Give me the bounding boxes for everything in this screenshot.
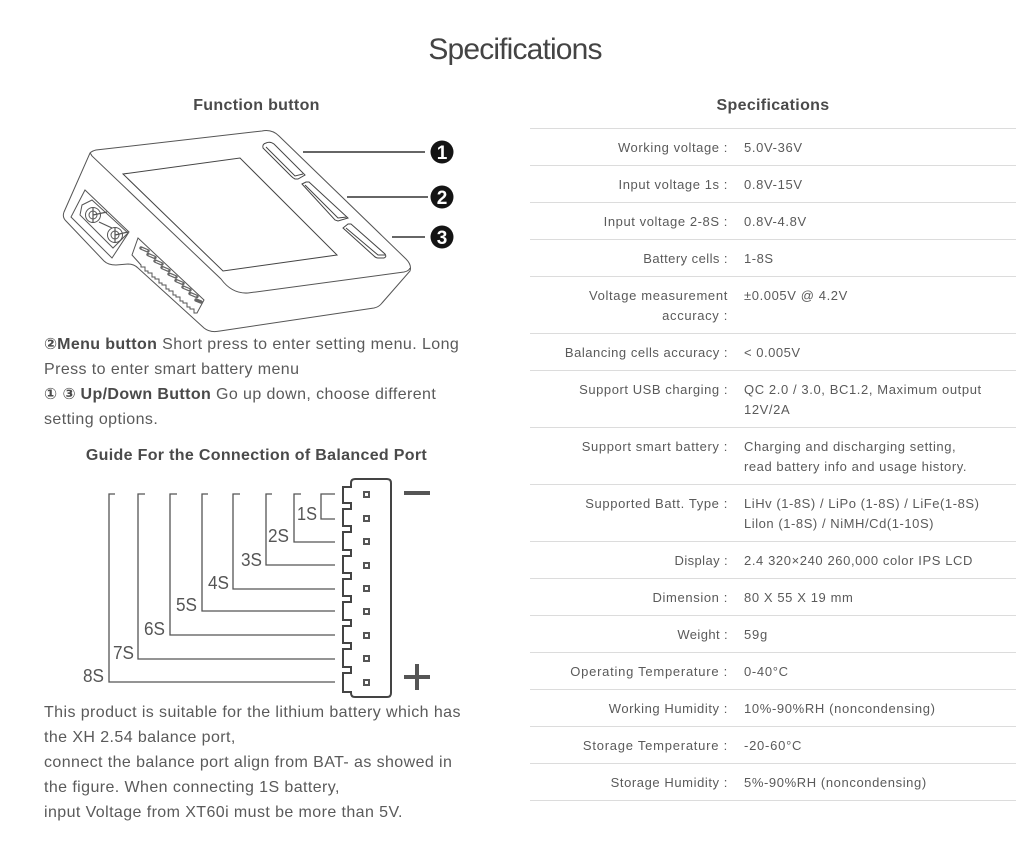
wire labels: 2S [268, 526, 289, 546]
row: USB charging: QC 2.0 / 3.0, BC1.2, Maximum output [744, 382, 982, 397]
row: storage humidity: Storage Humidity : [611, 775, 728, 790]
row: input voltage 1s: 0.8V-15V [744, 177, 803, 192]
row: working voltage: Working voltage : [618, 140, 728, 155]
balance port wiring diagram [83, 478, 430, 698]
row: display: Display : [675, 553, 728, 568]
heading: function button: Function button [193, 97, 320, 114]
callout line 3 [392, 236, 425, 238]
row: input voltage 2-8S: Input voltage 2-8S : [604, 214, 728, 229]
wire labels: 6S [144, 619, 165, 639]
row: battery cells: 1-8S [744, 251, 774, 266]
row: smart battery: Charging and discharging setting, [744, 439, 956, 454]
text: button descriptions: Press to enter smart battery menu [44, 361, 299, 378]
row: weight: 59g [744, 627, 768, 642]
row: battery type: Lilon (1-8S) / NiMH/Cd(1-10S) [744, 516, 934, 531]
connector housing [343, 479, 391, 697]
row: input voltage 1s: Input voltage 1s : [619, 177, 728, 192]
callout marker 2 [430, 186, 454, 209]
wire labels: 7S [113, 643, 134, 663]
text: balance port note: This product is suitable for the lithium battery which has [44, 704, 461, 721]
row: smart battery: Support smart battery : [582, 439, 728, 454]
callout line 1 [303, 151, 425, 153]
connector pins [364, 492, 369, 685]
wire labels: 5S [176, 595, 197, 615]
row: USB charging: Support USB charging : [579, 382, 728, 397]
icon: button 3 [343, 224, 386, 258]
text: balance port note [44, 704, 461, 821]
wire labels [83, 504, 317, 686]
wire labels: 8S [83, 666, 104, 686]
text: button descriptions: setting options. [44, 411, 158, 428]
icon: power port [71, 190, 129, 258]
row: working humidity: 10%-90%RH (noncondensing) [744, 701, 936, 716]
row: balancing cells accuracy: < 0.005V [744, 345, 801, 360]
text: balance port note: the figure. When connecting 1S battery, [44, 779, 340, 796]
icon: screen [123, 158, 337, 271]
row: dimension: 80 X 55 X 19 mm [744, 590, 853, 605]
callout marker 1 [430, 140, 454, 164]
row: operating temperature: 0-40°C [744, 664, 789, 679]
wire labels: 4S [208, 573, 229, 593]
row: USB charging: 12V/2A [744, 402, 790, 417]
callout marker 3: 3 [437, 228, 447, 249]
icon: device body [63, 131, 410, 332]
minus sign [404, 491, 430, 495]
plus sign [404, 664, 430, 690]
device illustration with button callouts [62, 130, 454, 332]
row: battery type: Supported Batt. Type : [585, 496, 728, 511]
row: working voltage: 5.0V-36V [744, 140, 803, 155]
callout line 2 [347, 196, 428, 198]
heading: balanced port guide: Guide For the Connection of Balanced Port [86, 447, 427, 464]
row: weight: Weight : [677, 627, 728, 642]
heading: specifications table: Specifications [717, 97, 829, 114]
row: input voltage 2-8S: 0.8V-4.8V [744, 214, 807, 229]
text: button descriptions: ②Menu button Short press to enter setting menu. Long [44, 335, 459, 353]
callout marker 3 [430, 226, 454, 249]
row: storage humidity: 5%-90%RH (noncondensing) [744, 775, 927, 790]
icon: balance connector [132, 238, 204, 313]
row: display: 2.4 320×240 260,000 color IPS LCD [744, 553, 973, 568]
row: storage temperature: Storage Temperature : [583, 738, 728, 753]
wires [109, 494, 335, 682]
row: operating temperature: Operating Temperature : [570, 664, 728, 679]
callout marker 2: 2 [437, 188, 447, 209]
row: battery cells: Battery cells : [643, 251, 728, 266]
icon: button 2 [302, 182, 348, 221]
text: button descriptions: ① ③ Up/Down Button Go up down, choose different [44, 385, 436, 403]
row: voltage measurement accuracy: accuracy : [662, 308, 728, 323]
title: Specifications [428, 33, 602, 66]
row: dimension: Dimension : [653, 590, 728, 605]
row: smart battery: read battery info and usage history. [744, 459, 967, 474]
row: working humidity: Working Humidity : [609, 701, 728, 716]
row: storage temperature: -20-60°C [744, 738, 802, 753]
row: battery type: LiHv (1-8S) / LiPo (1-8S) / LiFe(1-8S) [744, 496, 979, 511]
text: balance port note: the XH 2.54 balance port, [44, 729, 236, 746]
wire labels: 1S [297, 504, 317, 524]
callout marker 1: 1 [437, 143, 448, 164]
row: balancing cells accuracy: Balancing cells accuracy : [565, 345, 728, 360]
text: balance port note: input Voltage from XT60i must be more than 5V. [44, 804, 403, 821]
text: balance port note: connect the balance port align from BAT- as showed in [44, 754, 452, 771]
row: voltage measurement accuracy: Voltage measurement [589, 288, 728, 303]
row: voltage measurement accuracy: ±0.005V @ 4.2V [744, 288, 848, 303]
icon: button 1 [263, 142, 305, 179]
wire labels: 3S [241, 550, 262, 570]
text: button descriptions [44, 335, 459, 428]
